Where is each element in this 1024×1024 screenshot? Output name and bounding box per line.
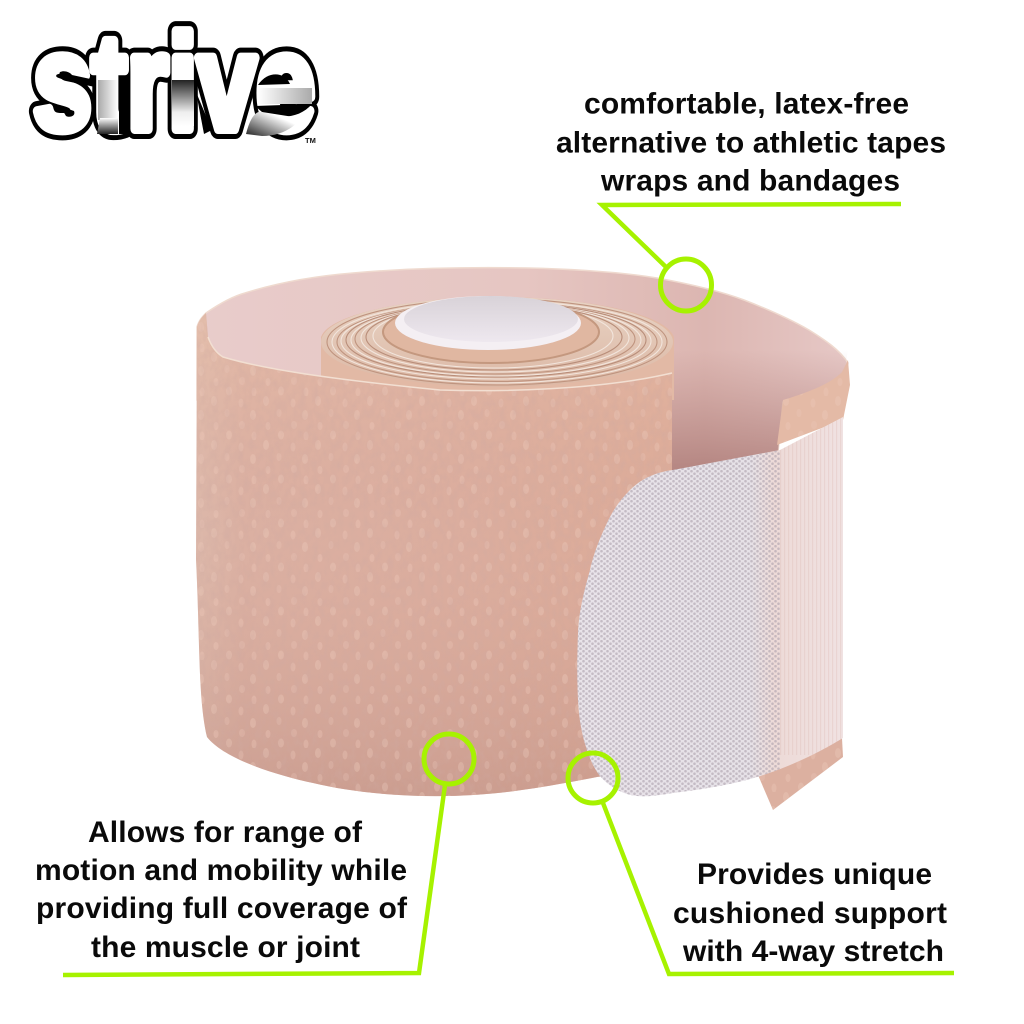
leader line: [603, 803, 954, 974]
leader line: [63, 785, 445, 975]
front tape band: [190, 310, 680, 800]
callout text: comfortable, latex-free: [584, 88, 909, 120]
callout text: providing full coverage of: [36, 892, 408, 925]
marker circle: [568, 753, 618, 803]
lower tan flap: [758, 738, 843, 810]
logo wordmark outline: strive: [33, 7, 315, 158]
leader line: [602, 204, 901, 268]
callout text: [35, 816, 408, 964]
marker circle: [660, 259, 712, 311]
callout text: wraps and bandages: [600, 164, 900, 198]
inner liner of outer wrap: [197, 268, 848, 480]
callout text: Provides unique: [697, 858, 932, 891]
callout: range of motion: [35, 734, 474, 975]
callout: cushioned support: [568, 753, 954, 974]
inner tape coil: [321, 296, 674, 400]
upper tan flap: [777, 360, 850, 445]
white backing tape: [575, 415, 846, 800]
logo shading accents: [59, 71, 312, 136]
tape roll photo: [190, 268, 850, 810]
logo: strive: [33, 7, 316, 158]
callout text: [556, 88, 946, 198]
callout text: Allows for range of: [88, 816, 363, 849]
callout: comfortable latex-free: [556, 88, 946, 311]
callout text: alternative to athletic tapes: [556, 126, 946, 160]
callout text: with 4-way stretch: [682, 935, 944, 968]
marker circle: [424, 734, 474, 784]
logo wordmark fill: strive: [33, 7, 315, 158]
callout text: [673, 858, 947, 968]
callout text: motion and mobility while: [35, 854, 407, 887]
callout text: the muscle or joint: [91, 931, 360, 964]
callout text: cushioned support: [673, 897, 947, 930]
logo trademark: TM: [305, 136, 316, 145]
core hole: [395, 296, 581, 350]
